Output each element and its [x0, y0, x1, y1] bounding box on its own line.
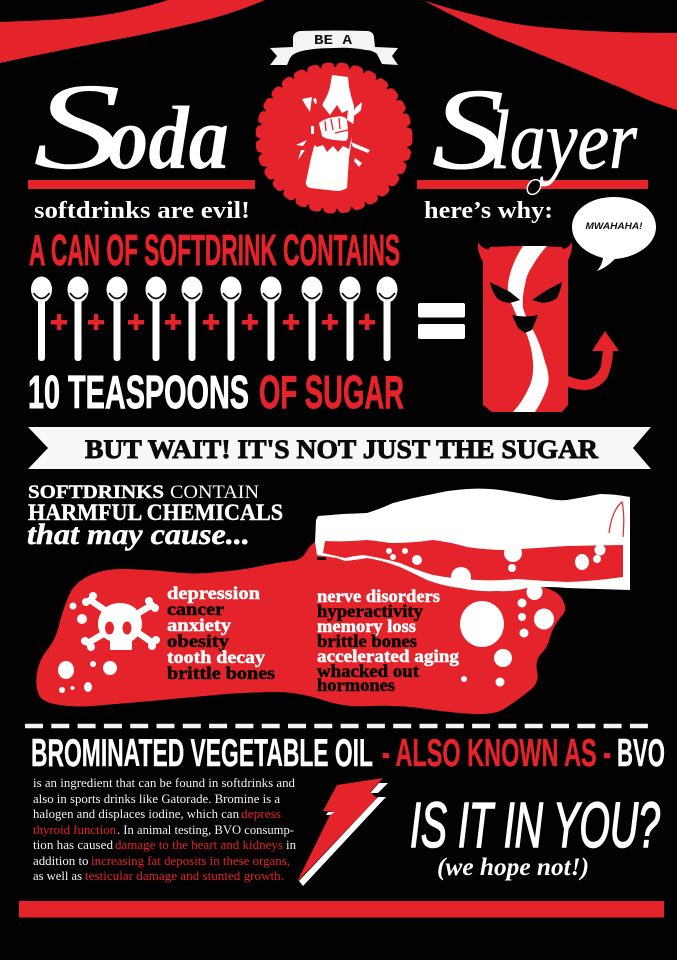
heading: softdrinks contain harmful chemicals: that may cause... [27, 518, 250, 551]
subtitle left: softdrinks are evil! [34, 198, 250, 224]
title: Soda: S [33, 58, 121, 195]
list: effects column one: anxiety [167, 615, 231, 635]
banner: but wait [28, 427, 651, 469]
emblem: be a soda slayer badge [260, 30, 408, 209]
heading: softdrinks contain harmful chemicals: CONTAIN [170, 482, 259, 503]
paragraph: about bvo: addition to [33, 854, 88, 868]
list: effects column two: memory loss [317, 616, 416, 636]
list: effects column one [167, 583, 275, 683]
list: effects column one: depression [167, 583, 260, 603]
bottle glass [315, 489, 630, 591]
ten teaspoons [31, 276, 398, 361]
paragraph: about bvo: is an ingredient that can be found in softdrinks and [33, 776, 296, 790]
paragraph: about bvo: also in sports drinks like Gatorade. Bromine is a [33, 792, 280, 806]
banner: but wait: BUT WAIT! IT'S NOT JUST THE SUGAR [85, 435, 598, 464]
title: Slayer [432, 66, 637, 197]
heading: 10 teaspoons of sugar: OF SUGAR [259, 366, 404, 418]
red rule left [28, 180, 255, 189]
spoon heads [31, 276, 398, 302]
icon: lightning bolt [297, 778, 388, 886]
neck shadow [317, 557, 326, 560]
bottom red bar [19, 901, 664, 918]
paragraph: about bvo: thyroid function [33, 823, 117, 837]
icon: skull and crossbones [81, 592, 160, 651]
list: effects column two: whacked out [317, 661, 419, 681]
paragraph: about bvo: as well as [33, 869, 82, 883]
heading: 10 teaspoons of sugar: 10 TEASPOONS [28, 366, 249, 418]
title: Soda: oda [108, 89, 229, 188]
spoon crescents [34, 293, 395, 298]
speech bubble: MWAHAHA! [586, 221, 642, 232]
spoon handles [38, 296, 390, 361]
paragraph: about bvo: testicular damage and stunted growth. [85, 869, 284, 883]
ribbon: be a: BE A [314, 33, 353, 49]
list: effects column two: nerve disorders [317, 586, 440, 606]
plus signs [51, 314, 375, 330]
can body [483, 246, 568, 412]
paragraph: about bvo: tion has caused [33, 838, 114, 852]
subtitle right: here’s why: [424, 198, 553, 224]
top right red swoosh [422, 0, 677, 110]
puddle bubbles [58, 584, 554, 693]
red rule right [417, 180, 648, 189]
tipped bottle [315, 489, 630, 591]
list: effects column two: hyperactivity [317, 601, 423, 621]
mouth [512, 315, 538, 333]
list: effects column two [317, 586, 459, 695]
heading: softdrinks contain harmful chemicals [27, 482, 283, 551]
paragraph: about bvo: halogen and displaces iodine, which can [33, 807, 240, 821]
ribbon: be a [270, 30, 398, 65]
white wave [508, 246, 549, 412]
list: effects column one: obesity [167, 631, 229, 651]
gear badge [260, 67, 408, 209]
speech bubble [572, 197, 656, 271]
paragraph: about bvo: depress [241, 807, 281, 821]
list: effects column two: accelerated aging [317, 646, 459, 666]
list: effects column two: hormones [317, 675, 395, 695]
horns [478, 242, 572, 262]
fist [311, 116, 348, 141]
paragraph: about bvo: . In animal testing, BVO consump- [117, 823, 294, 837]
red spill puddle [36, 538, 565, 714]
list: effects column one: tooth decay [167, 647, 265, 667]
eyes [490, 282, 562, 303]
icon: devil soda can [478, 242, 619, 412]
glare on bottle [609, 502, 624, 537]
heading: softdrinks contain harmful chemicals: HARMFUL CHEMICALS [28, 500, 283, 525]
equals sign [418, 303, 465, 339]
paragraph: about bvo: damage to the heart and kidneys [115, 838, 283, 852]
paragraph: about bvo: increasing fat deposits in these organs, [91, 854, 290, 868]
paragraph: about bvo: in [286, 838, 297, 852]
icon: soda bottle smashed by fist [296, 75, 370, 191]
title: Slayer: layer [490, 94, 637, 187]
paragraph: about bvo [33, 776, 297, 883]
list: effects column one: brittle bones [167, 663, 275, 683]
bottle bubbles [386, 544, 606, 587]
slogan: we hope not: (we hope not!) [437, 854, 589, 881]
title: Slayer: S [432, 66, 504, 194]
list: effects column one: cancer [167, 599, 224, 619]
top left red swoosh [0, 0, 265, 63]
list: effects column two: brittle bones [317, 631, 417, 651]
red soda inside bottle [323, 540, 623, 582]
title: Soda [33, 58, 229, 195]
heading: brominated vegetable oil also known as bvo: BROMINATED VEGETABLE OIL [31, 732, 373, 775]
heading: softdrinks contain harmful chemicals: SOFTDRINKS [28, 482, 164, 503]
tail [566, 331, 619, 390]
